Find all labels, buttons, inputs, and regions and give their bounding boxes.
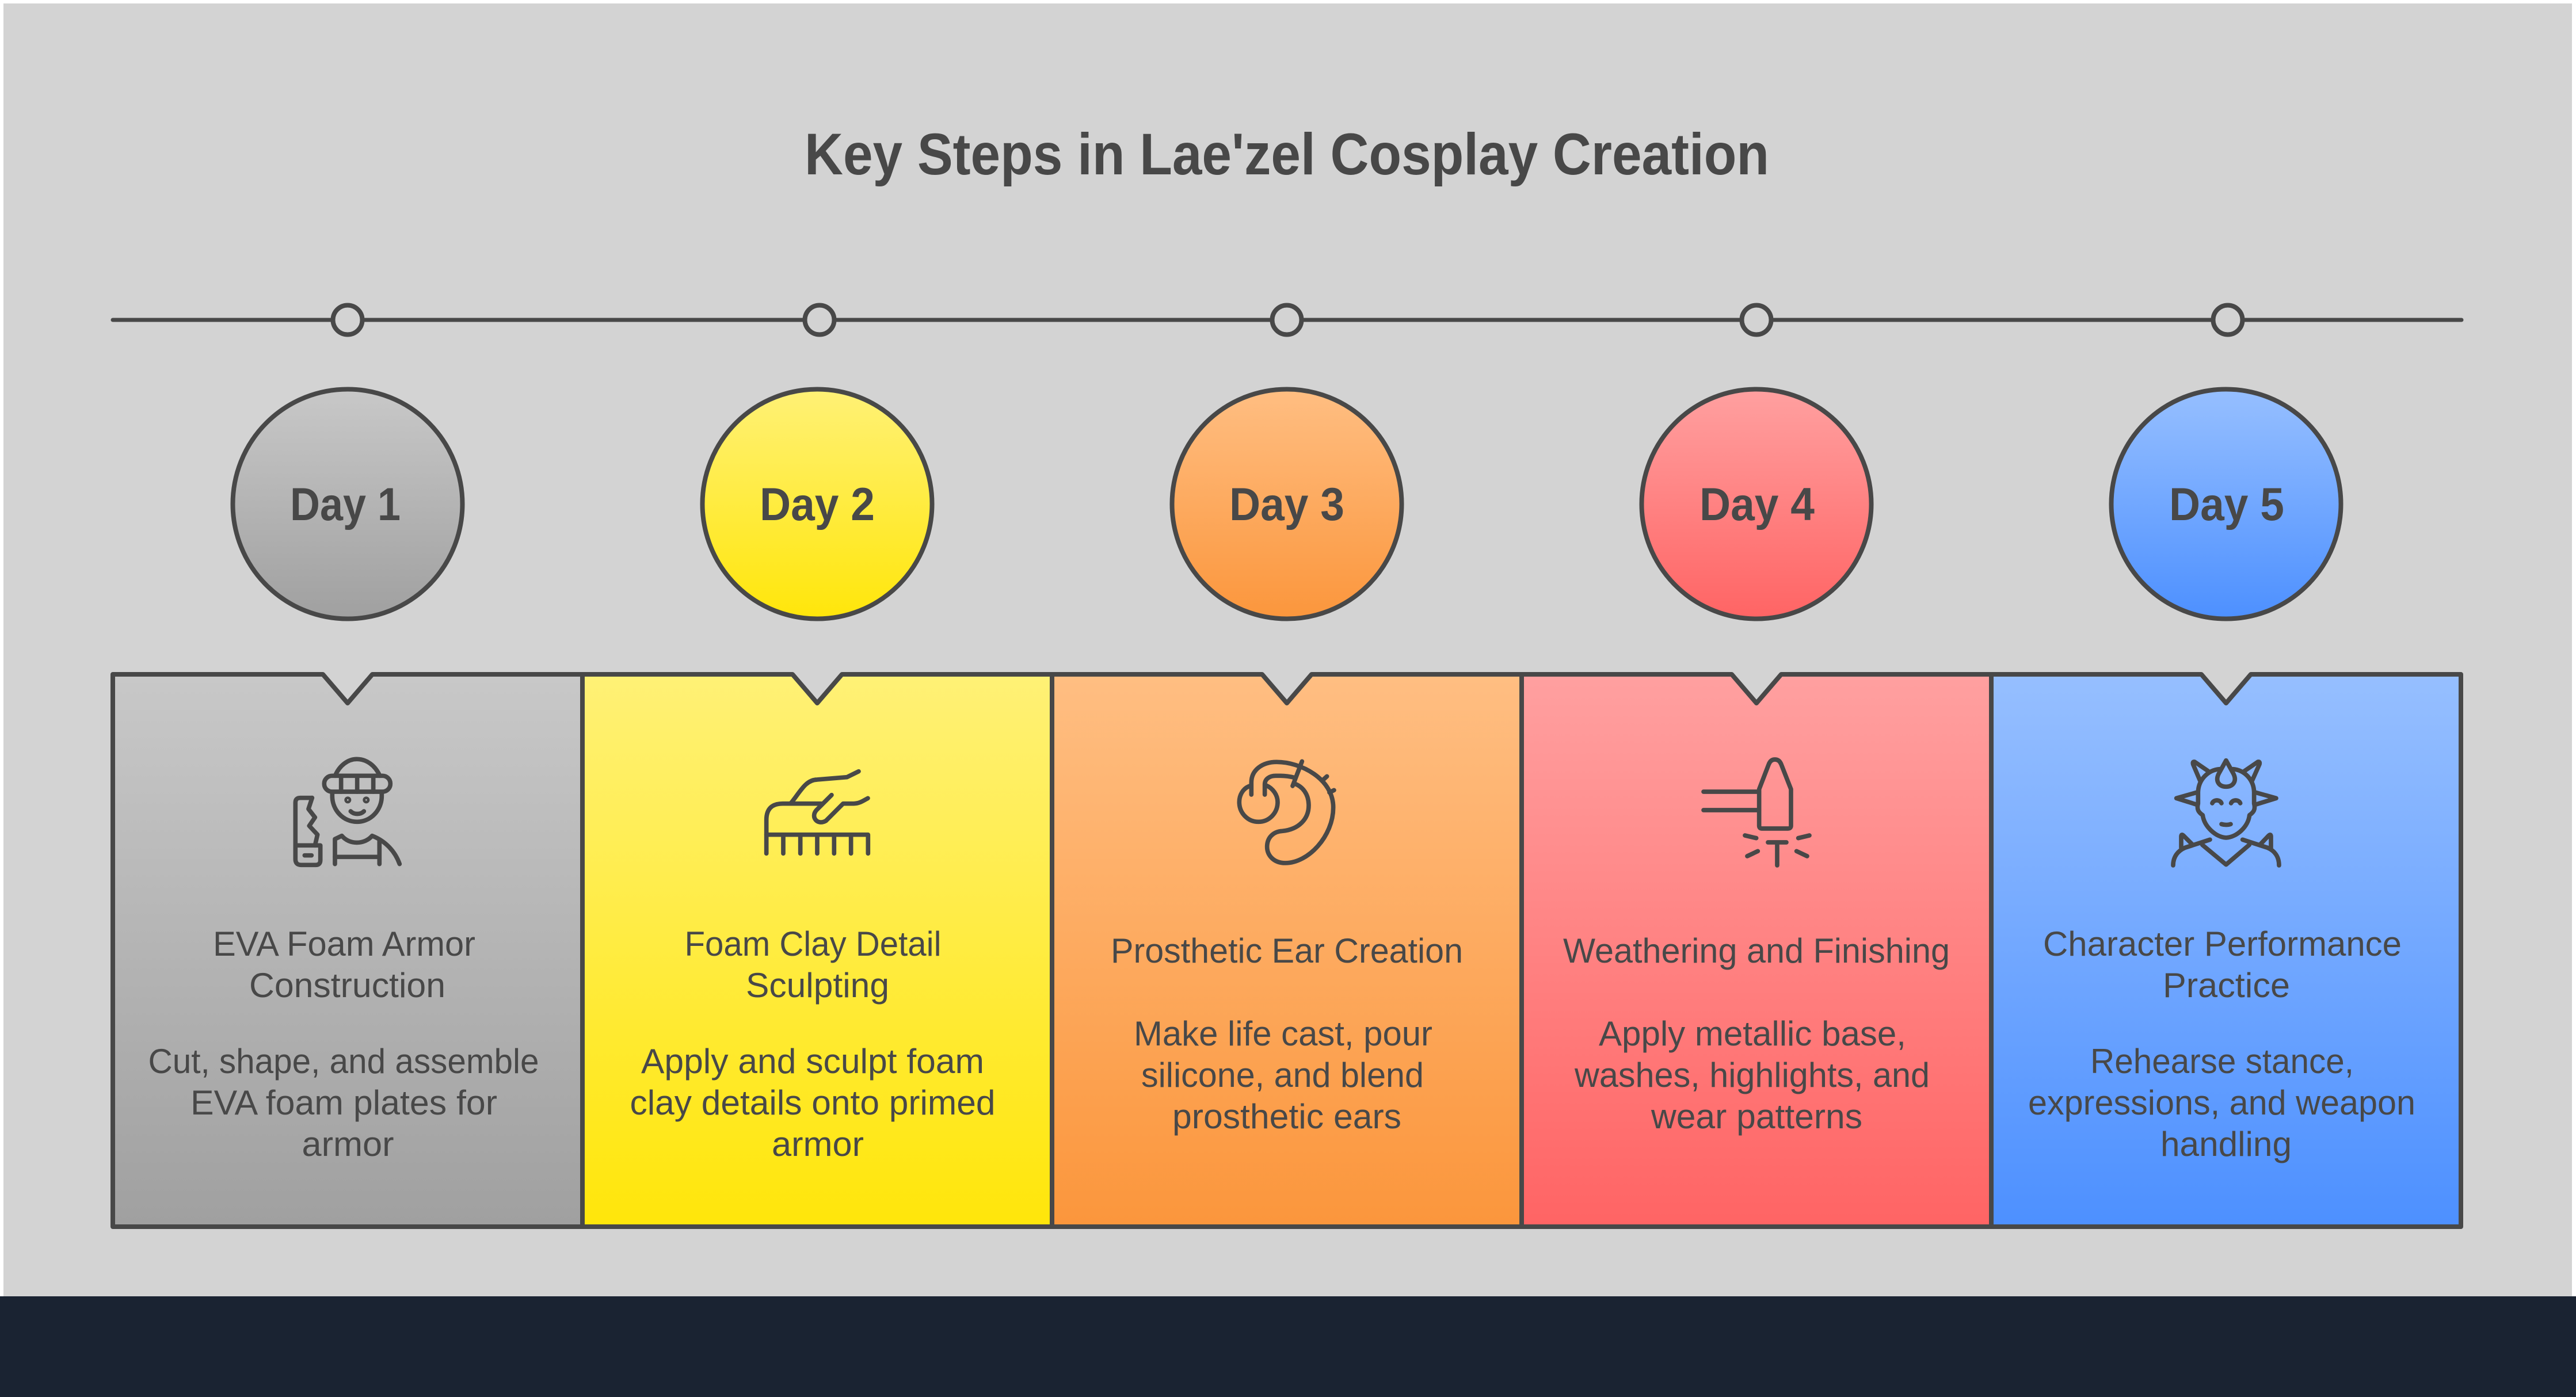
icon: Lae'zel character (2173, 761, 2279, 865)
heading: foam clay detail sculpting: Foam Clay Detail (685, 925, 942, 963)
description: day 2: armor (772, 1125, 864, 1163)
heading: foam clay detail sculpting (685, 925, 942, 1005)
heading: weathering and finishing: Weathering and Finishing (1563, 932, 1950, 970)
description: day 3: prosthetic ears (1172, 1097, 1401, 1136)
description: day 2 (630, 1042, 996, 1163)
description: day 4 (1574, 1014, 1930, 1136)
description: day 1: Cut, shape, and assemble (148, 1042, 539, 1081)
description: day 1 (148, 1042, 539, 1163)
icon: hammer with sparks (1704, 759, 1809, 865)
description: day 5 (2028, 1042, 2415, 1163)
description: day 1: EVA foam plates for (190, 1083, 497, 1122)
day 1 badge: Day 1 (290, 479, 401, 530)
description: day 4: wear patterns (1651, 1097, 1862, 1136)
footer band (0, 1296, 2576, 1397)
title: Key Steps in Lae'zel Cosplay Creation (805, 121, 1769, 187)
description: day 3 (1134, 1014, 1432, 1136)
day 4 badge: Day 4 (1699, 479, 1815, 530)
day 3 badge (1172, 389, 1402, 619)
description: day 3: silicone, and blend (1141, 1056, 1424, 1094)
description: day 2: Apply and sculpt foam (641, 1042, 984, 1081)
day 4 badge (1641, 389, 1872, 619)
heading: prosthetic ear creation: Prosthetic Ear Creation (1111, 932, 1463, 970)
panel: day 3 prosthetic ears (1052, 674, 1522, 1227)
panel: day 4 weathering (1522, 674, 1991, 1227)
day 2 badge: Day 2 (760, 479, 875, 530)
day 1 badge (233, 389, 463, 619)
panel: day 5 performance (1991, 674, 2461, 1227)
icon: hand on comb tool (767, 772, 868, 853)
day 5 badge (2111, 389, 2341, 619)
timeline (113, 305, 2461, 335)
description: day 4: washes, highlights, and (1574, 1056, 1930, 1094)
description: day 5: Rehearse stance, (2090, 1042, 2354, 1081)
day 2 badge (702, 389, 932, 619)
description: day 1: armor (302, 1125, 394, 1163)
description: day 3: Make life cast, pour (1134, 1014, 1432, 1053)
icon: ear (1239, 761, 1334, 863)
day 5 badge: Day 5 (2169, 479, 2284, 530)
day 3 badge: Day 3 (1229, 479, 1344, 530)
description: day 5: expressions, and weapon (2028, 1083, 2415, 1122)
panel: day 2 foam clay (582, 674, 1052, 1227)
heading: EVA foam armor construction: Construction (249, 966, 445, 1005)
heading: foam clay detail sculpting: Sculpting (746, 966, 889, 1005)
heading: character performance practice: Character Performance (2043, 925, 2402, 963)
heading: character performance practice: Practice (2163, 966, 2290, 1005)
description: day 2: clay details onto primed (630, 1083, 996, 1122)
heading: EVA foam armor construction: EVA Foam Armor (213, 925, 475, 963)
icon: worker with saw (295, 759, 399, 865)
panel: day 1 EVA foam armor (113, 674, 582, 1227)
description: day 5: handling (2160, 1125, 2292, 1163)
heading: character performance practice (2043, 925, 2402, 1005)
description: day 4: Apply metallic base, (1599, 1014, 1906, 1053)
heading: EVA foam armor construction (213, 925, 475, 1005)
